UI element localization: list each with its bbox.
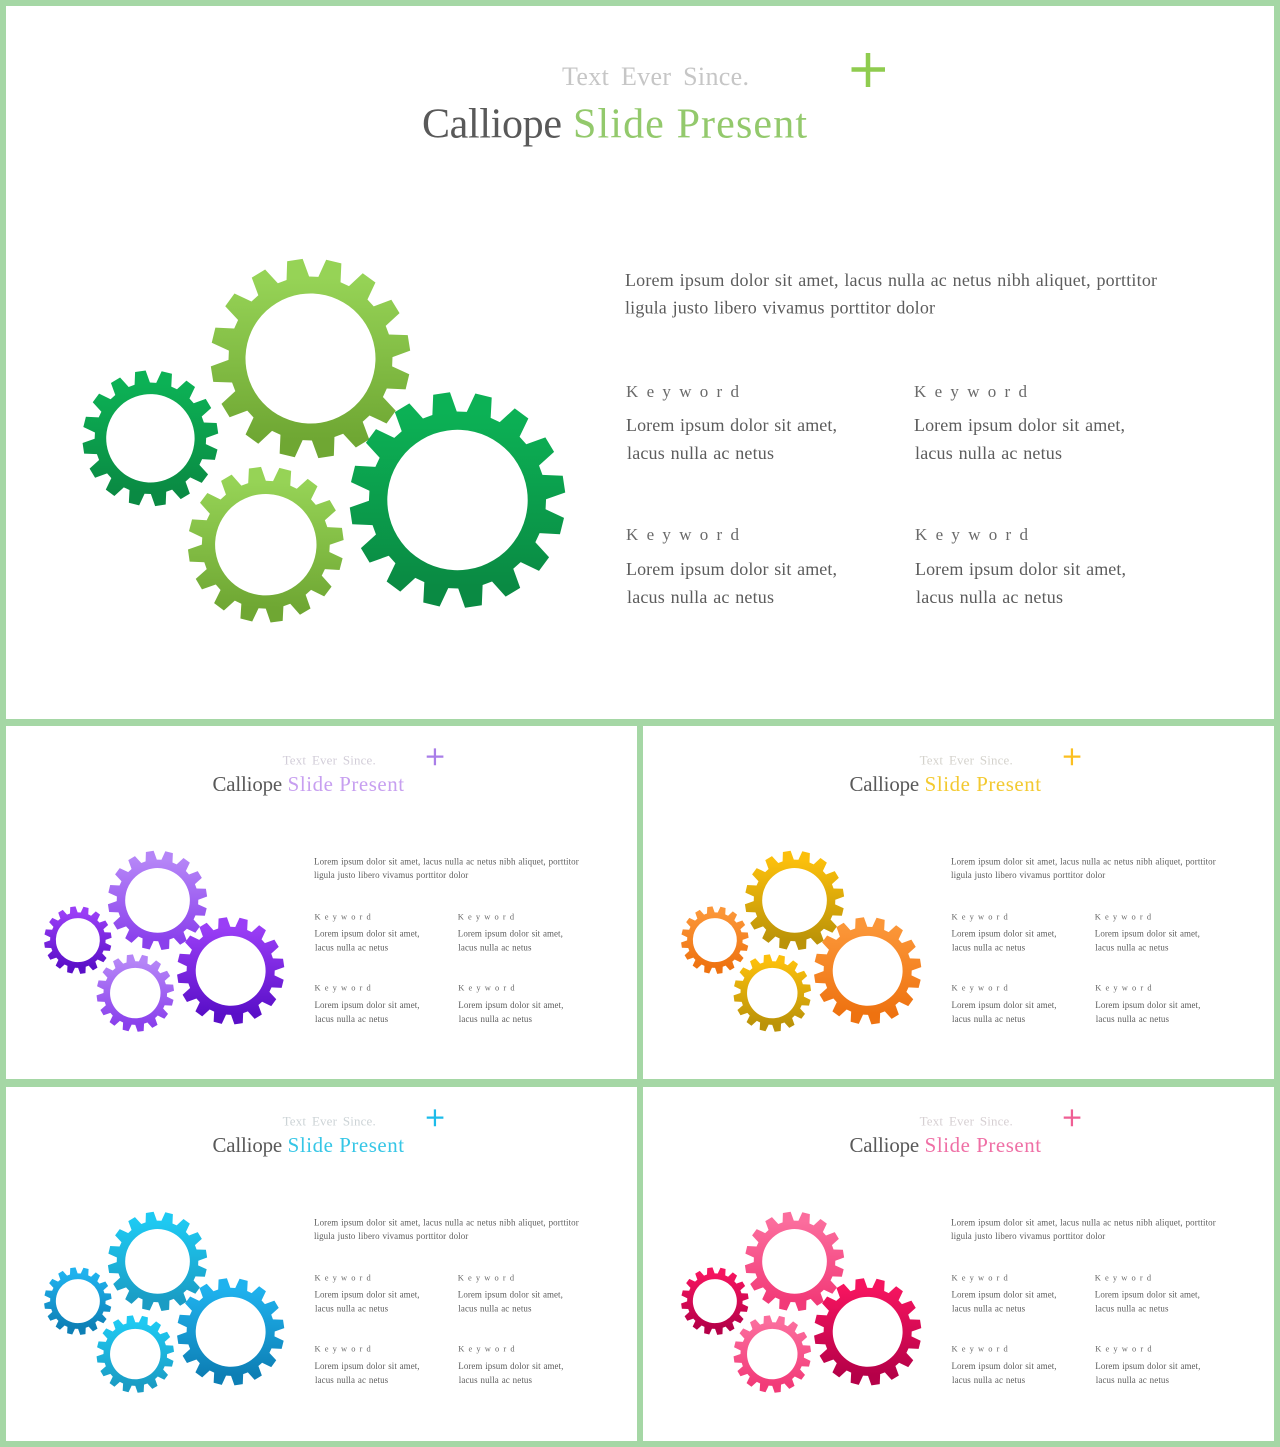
keyword block 3 bbox=[626, 525, 837, 607]
title bbox=[213, 1133, 404, 1157]
keyword blocks: Lorem ipsum dolor sit amet, bbox=[952, 1289, 1057, 1299]
keyword blocks: Lorem ipsum dolor sit amet, bbox=[315, 1000, 420, 1010]
keyword blocks: Lorem ipsum dolor sit amet, bbox=[952, 1361, 1057, 1371]
keyword blocks: Keyword bbox=[458, 1344, 515, 1354]
intro text bbox=[314, 856, 579, 880]
keyword blocks: lacus nulla ac netus bbox=[458, 942, 532, 952]
icon: plus bbox=[852, 53, 885, 87]
keyword blocks: lacus nulla ac netus bbox=[315, 1375, 389, 1385]
title bbox=[213, 772, 404, 796]
keyword blocks: lacus nulla ac netus bbox=[1095, 942, 1169, 952]
keyword blocks: Lorem ipsum dolor sit amet, bbox=[458, 1289, 563, 1299]
keyword blocks: lacus nulla ac netus bbox=[458, 1303, 532, 1313]
keyword blocks: Keyword bbox=[315, 1344, 372, 1354]
intro text: ligula justo libero vivamus porttitor dolor bbox=[951, 870, 1105, 880]
keyword blocks: Keyword bbox=[315, 1273, 372, 1283]
keyword blocks: lacus nulla ac netus bbox=[315, 942, 389, 952]
keyword block 3: Keyword bbox=[626, 525, 740, 544]
gear: small dark bbox=[68, 356, 233, 520]
title bbox=[850, 772, 1041, 796]
keyword blocks: Lorem ipsum dolor sit amet, bbox=[1095, 1000, 1200, 1010]
keyword blocks: lacus nulla ac netus bbox=[952, 1014, 1026, 1024]
gear cluster bbox=[674, 841, 933, 1040]
title: Calliope bbox=[850, 772, 919, 796]
panel: orange slide bbox=[643, 726, 1274, 1079]
keyword block 1 bbox=[626, 382, 837, 463]
keyword blocks: Keyword bbox=[1095, 1273, 1152, 1283]
keyword blocks: Lorem ipsum dolor sit amet, bbox=[1095, 928, 1200, 938]
icon: plus bbox=[427, 1109, 443, 1126]
keyword blocks: lacus nulla ac netus bbox=[1096, 1014, 1169, 1024]
keyword blocks: lacus nulla ac netus bbox=[459, 1014, 532, 1024]
title: Calliope bbox=[213, 1133, 282, 1157]
panel: green main slide bbox=[6, 6, 1274, 719]
keyword blocks: lacus nulla ac netus bbox=[315, 1303, 389, 1313]
title: Slide Present bbox=[288, 1133, 404, 1157]
keyword blocks: lacus nulla ac netus bbox=[1095, 1303, 1169, 1313]
keyword blocks: Keyword bbox=[315, 983, 372, 993]
intro text bbox=[951, 856, 1216, 880]
intro text: Lorem ipsum dolor sit amet, lacus nulla ac netus nibh aliquet, porttitor bbox=[951, 1217, 1216, 1227]
intro text: ligula justo libero vivamus porttitor dolor bbox=[314, 870, 468, 880]
keyword blocks: Lorem ipsum dolor sit amet, bbox=[952, 1000, 1057, 1010]
keyword blocks: Keyword bbox=[952, 912, 1009, 922]
keyword blocks: Keyword bbox=[952, 983, 1009, 993]
intro text: ligula justo libero vivamus porttitor dolor bbox=[951, 1231, 1105, 1241]
keyword blocks: lacus nulla ac netus bbox=[952, 1375, 1026, 1385]
keyword block 1: Lorem ipsum dolor sit amet, bbox=[626, 415, 837, 435]
keyword block 3: Lorem ipsum dolor sit amet, bbox=[626, 559, 837, 579]
keyword block 2: Keyword bbox=[914, 382, 1028, 401]
icon: plus bbox=[1064, 748, 1080, 765]
keyword blocks: lacus nulla ac netus bbox=[952, 942, 1026, 952]
keyword blocks: Keyword bbox=[458, 912, 515, 922]
keyword blocks bbox=[315, 1273, 563, 1385]
keyword blocks: Lorem ipsum dolor sit amet, bbox=[1095, 1361, 1200, 1371]
keyword blocks: Keyword bbox=[1095, 912, 1152, 922]
gear cluster bbox=[68, 238, 588, 639]
title: Slide Present bbox=[925, 772, 1041, 796]
intro text: Lorem ipsum dolor sit amet, lacus nulla ac netus nibh aliquet, porttitor bbox=[314, 856, 579, 866]
keyword block 2: Lorem ipsum dolor sit amet, bbox=[914, 415, 1125, 435]
subtitle: Text Ever Since. bbox=[283, 752, 376, 767]
panel: blue slide bbox=[6, 1087, 637, 1441]
keyword blocks: lacus nulla ac netus bbox=[315, 1014, 389, 1024]
keyword block 2 bbox=[914, 382, 1125, 463]
keyword block 1: lacus nulla ac netus bbox=[627, 443, 774, 463]
intro text: ligula justo libero vivamus porttitor dolor bbox=[625, 298, 935, 318]
keyword blocks: Lorem ipsum dolor sit amet, bbox=[458, 928, 563, 938]
subtitle: Text Ever Since. bbox=[562, 62, 749, 91]
keyword blocks: lacus nulla ac netus bbox=[1096, 1375, 1169, 1385]
gear: large light bbox=[190, 238, 431, 479]
keyword block 2: lacus nulla ac netus bbox=[915, 443, 1062, 463]
keyword blocks bbox=[315, 912, 563, 1024]
keyword blocks: Lorem ipsum dolor sit amet, bbox=[458, 1000, 563, 1010]
keyword block 4: lacus nulla ac netus bbox=[916, 587, 1063, 607]
keyword blocks: Lorem ipsum dolor sit amet, bbox=[315, 928, 420, 938]
title: Calliope bbox=[850, 1133, 919, 1157]
gear cluster bbox=[37, 841, 296, 1040]
subtitle: Text Ever Since. bbox=[920, 752, 1013, 767]
keyword block 1: Keyword bbox=[626, 382, 740, 401]
title: Slide Present bbox=[573, 102, 807, 148]
keyword blocks: Lorem ipsum dolor sit amet, bbox=[315, 1289, 420, 1299]
keyword blocks: Keyword bbox=[1095, 983, 1152, 993]
title: Slide Present bbox=[288, 772, 404, 796]
icon: plus bbox=[1064, 1109, 1080, 1126]
panel: purple slide bbox=[6, 726, 637, 1079]
gear cluster bbox=[674, 1202, 933, 1401]
keyword block 4 bbox=[915, 525, 1126, 607]
title: Slide Present bbox=[925, 1133, 1041, 1157]
keyword blocks bbox=[952, 1273, 1200, 1385]
keyword blocks: Lorem ipsum dolor sit amet, bbox=[315, 1361, 420, 1371]
keyword blocks: Keyword bbox=[952, 1273, 1009, 1283]
intro text: Lorem ipsum dolor sit amet, lacus nulla ac netus nibh aliquet, porttitor bbox=[625, 270, 1157, 290]
keyword block 4: Lorem ipsum dolor sit amet, bbox=[915, 559, 1126, 579]
title bbox=[850, 1133, 1041, 1157]
intro text bbox=[314, 1217, 579, 1241]
title: Calliope bbox=[422, 102, 562, 148]
icon: plus bbox=[427, 748, 443, 765]
intro text bbox=[625, 270, 1157, 318]
keyword blocks: Keyword bbox=[315, 912, 372, 922]
keyword block 3: lacus nulla ac netus bbox=[627, 587, 774, 607]
keyword block 4: Keyword bbox=[915, 525, 1028, 544]
intro text: Lorem ipsum dolor sit amet, lacus nulla ac netus nibh aliquet, porttitor bbox=[951, 856, 1216, 866]
keyword blocks: Lorem ipsum dolor sit amet, bbox=[458, 1361, 563, 1371]
intro text: ligula justo libero vivamus porttitor dolor bbox=[314, 1231, 468, 1241]
keyword blocks: Keyword bbox=[458, 983, 515, 993]
title bbox=[422, 102, 807, 148]
intro text: Lorem ipsum dolor sit amet, lacus nulla ac netus nibh aliquet, porttitor bbox=[314, 1217, 579, 1227]
keyword blocks: lacus nulla ac netus bbox=[952, 1303, 1026, 1313]
keyword blocks bbox=[952, 912, 1200, 1024]
gear cluster bbox=[37, 1202, 296, 1401]
keyword blocks: Keyword bbox=[952, 1344, 1009, 1354]
keyword blocks: Lorem ipsum dolor sit amet, bbox=[952, 928, 1057, 938]
gear: large dark bbox=[327, 369, 588, 631]
subtitle: Text Ever Since. bbox=[283, 1113, 376, 1128]
subtitle: Text Ever Since. bbox=[920, 1113, 1013, 1128]
gear: small light bbox=[171, 450, 361, 639]
keyword blocks: Keyword bbox=[1095, 1344, 1152, 1354]
intro text bbox=[951, 1217, 1216, 1241]
keyword blocks: lacus nulla ac netus bbox=[459, 1375, 532, 1385]
keyword blocks: Keyword bbox=[458, 1273, 515, 1283]
panel: pink slide bbox=[643, 1087, 1274, 1441]
title: Calliope bbox=[213, 772, 282, 796]
keyword blocks: Lorem ipsum dolor sit amet, bbox=[1095, 1289, 1200, 1299]
